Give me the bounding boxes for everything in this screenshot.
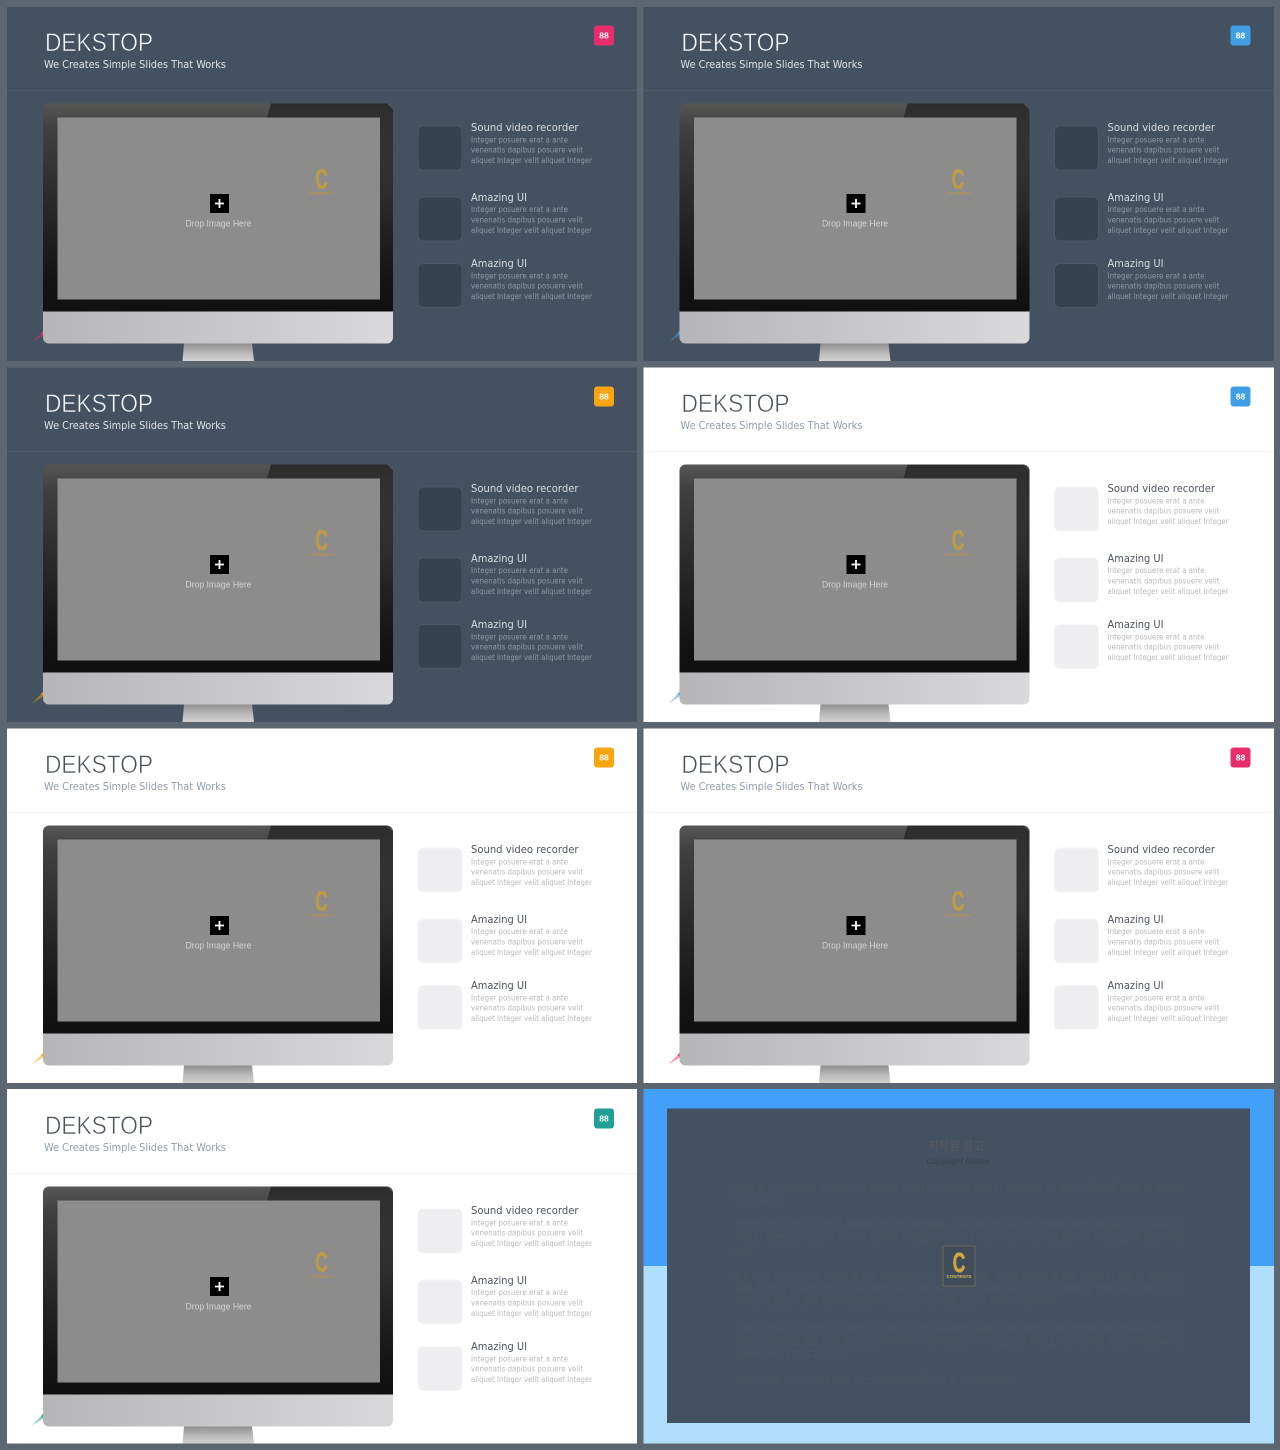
slide background — [644, 368, 1274, 722]
feature 3: Amazing UI — [471, 618, 527, 631]
feature 2: venenatis dapibus posuere velit — [471, 577, 583, 586]
feature 2: Integer posuere erat a ante — [471, 566, 568, 575]
feature 3: venenatis dapibus posuere velit — [1108, 1004, 1220, 1013]
logo: C — [953, 1247, 965, 1278]
feature 3 — [418, 1340, 593, 1390]
badge: 88 — [599, 752, 609, 762]
slide 4: light, blue badge — [644, 368, 1274, 722]
feature 3: Amazing UI — [1108, 257, 1164, 270]
monitor — [680, 826, 1030, 1083]
feature 1: venenatis dapibus posuere velit — [471, 146, 583, 155]
badge: 88 — [1236, 752, 1245, 762]
logo: C — [315, 885, 328, 917]
feature 3: venenatis dapibus posuere velit — [471, 1004, 583, 1013]
copyright body text: 구매한 콘텐츠는 개인과 회사의 업무에 사용할 수 있으나 다른 사용자에게 양도하거나 공유할 수 없습니다. — [734, 1232, 1185, 1243]
logo: CONTENTS — [946, 552, 970, 557]
feature 3: venenatis dapibus posuere velit — [1108, 643, 1220, 652]
screen placeholder — [58, 1200, 380, 1382]
accent pin — [668, 690, 681, 704]
feature 2: Integer posuere erat a ante — [1108, 566, 1205, 575]
feature 2: aliquet Integer velit aliquet Integer — [1108, 587, 1229, 596]
copyright body text: 안내드립니다. — [734, 1194, 784, 1204]
feature 2: Amazing UI — [1108, 913, 1164, 926]
monitor — [43, 104, 393, 361]
copyright body text: 사용 전에 각 글꼴의 라이선스를 확인하시기 바라며 상업적 사용 여부는 저작권자에게 문의하시기 바랍니다. — [734, 1283, 1185, 1294]
feature 2: Integer posuere erat a ante — [1108, 927, 1205, 936]
copyright body text — [734, 1182, 1185, 1385]
feature 2: aliquet Integer velit aliquet Integer — [471, 948, 593, 957]
light blue background lower — [644, 1266, 1274, 1444]
drop image label: Drop Image Here — [186, 940, 252, 952]
feature 1: Sound video recorder — [1108, 121, 1216, 134]
feature 3 — [1054, 979, 1229, 1030]
feature 2: Amazing UI — [471, 1274, 527, 1287]
slide background — [644, 7, 1274, 361]
accent pin — [668, 1052, 681, 1064]
accent pin — [32, 1052, 44, 1064]
feature 1: aliquet Integer velit aliquet Integer — [1108, 517, 1229, 526]
slide 8: copyright notice — [644, 1089, 1274, 1444]
badge — [1230, 386, 1250, 406]
slide 2: dark, blue badge — [644, 7, 1274, 361]
screen placeholder — [58, 840, 380, 1022]
heading — [680, 751, 863, 793]
feature 3 — [1054, 618, 1229, 668]
feature 1: aliquet Integer velit aliquet Integer — [471, 1239, 593, 1248]
drop image label: Drop Image Here — [186, 1302, 252, 1312]
feature 2: venenatis dapibus posuere velit — [471, 1299, 583, 1308]
feature 3: venenatis dapibus posuere velit — [471, 643, 583, 652]
feature 3: Amazing UI — [471, 257, 527, 270]
copyright body text: 양해 부탁드립니다. — [734, 1348, 849, 1359]
heading: DEKSTOP — [682, 751, 790, 779]
feature 1: Sound video recorder — [471, 482, 579, 495]
slide 5: light, orange badge — [7, 728, 637, 1083]
feature 1: venenatis dapibus posuere velit — [471, 1229, 583, 1238]
feature 1 — [418, 482, 593, 531]
feature 2 — [418, 913, 593, 963]
slide background — [7, 7, 637, 361]
logo: CONTENTS — [309, 1274, 334, 1279]
logo: CONTENTS — [946, 191, 970, 196]
monitor — [680, 464, 1030, 722]
accent pin — [32, 1412, 44, 1426]
icon: plus box — [210, 194, 229, 213]
feature 2: venenatis dapibus posuere velit — [1108, 938, 1220, 947]
logo — [943, 885, 973, 926]
feature 1: aliquet Integer velit aliquet Integer — [1108, 156, 1229, 165]
copyright title: 저작권 공고 — [928, 1139, 984, 1153]
copyright body text: 기타 자세한 사항은 고객 센터 또는 제작자에게 문의해 주시기 바랍니다. — [734, 1375, 1016, 1385]
badge: 88 — [599, 392, 609, 402]
logo: CONTENTS — [309, 913, 334, 918]
logo: C — [315, 524, 328, 556]
feature 2: Integer posuere erat a ante — [471, 205, 568, 214]
feature 1 — [1054, 121, 1229, 170]
blue background upper — [644, 1089, 1274, 1266]
feature 3: aliquet Integer velit aliquet Integer — [1108, 292, 1229, 301]
drop image label: Drop Image Here — [822, 940, 888, 952]
drop image label: Drop Image Here — [822, 218, 888, 230]
icon: plus box — [210, 916, 229, 935]
badge — [594, 386, 614, 406]
feature 2: Amazing UI — [1108, 191, 1164, 204]
copyright body text: 본 제품의 저작권은 제작자에게 있으며 구매자는 라이선스 범위 안에서만 이 콘텐츠를 사용할 수 있습니다. — [734, 1182, 1185, 1193]
heading: DEKSTOP — [45, 751, 153, 779]
logo: CONTENTS — [309, 191, 334, 196]
feature 2: aliquet Integer velit aliquet Integer — [1108, 226, 1229, 235]
heading — [44, 390, 226, 432]
screen placeholder — [694, 478, 1016, 660]
icon: plus box — [846, 916, 866, 935]
feature 3: venenatis dapibus posuere velit — [1108, 282, 1220, 291]
feature 2: aliquet Integer velit aliquet Integer — [471, 1309, 593, 1318]
badge — [594, 26, 614, 46]
feature 3: aliquet Integer velit aliquet Integer — [1108, 653, 1229, 662]
feature 2: Amazing UI — [471, 191, 527, 204]
copyright body text: 저작권 안내 콘텐츠의 무단 복제와 배포 및 재판매를 금지하며 위반 시 관련 법률에 따라 책임을 질 수 있습니다. — [734, 1219, 1185, 1230]
feature 2 — [1054, 913, 1229, 963]
feature 1: Integer posuere erat a ante — [1108, 136, 1205, 145]
feature 3: aliquet Integer velit aliquet Integer — [1108, 1014, 1229, 1023]
feature 1 — [1054, 843, 1229, 892]
feature 3: Integer posuere erat a ante — [471, 1355, 568, 1364]
logo: C — [315, 1246, 328, 1278]
feature 1: Sound video recorder — [1108, 843, 1216, 856]
feature 1: Sound video recorder — [471, 1204, 579, 1217]
badge — [594, 748, 614, 768]
logo: C — [952, 163, 964, 195]
logo: C — [952, 885, 964, 917]
heading: DEKSTOP — [682, 29, 790, 57]
logo: C — [952, 524, 964, 556]
feature 3: Integer posuere erat a ante — [471, 272, 568, 281]
accent pin — [32, 690, 44, 704]
heading: DEKSTOP — [45, 29, 153, 57]
feature 1: Integer posuere erat a ante — [471, 1219, 568, 1228]
screen placeholder — [58, 478, 380, 660]
drop image label: Drop Image Here — [822, 580, 888, 590]
slide background — [644, 728, 1274, 1083]
feature 2: aliquet Integer velit aliquet Integer — [471, 587, 593, 596]
feature 2: aliquet Integer velit aliquet Integer — [471, 226, 593, 235]
feature 1 — [418, 1204, 593, 1253]
copyright body text: 입니다. — [734, 1246, 754, 1257]
copyright body text: 제공된 이미지를 별도의 상품으로 판매하거나 다른 콘텐츠의 구성 요소로 재배포하는 행위는 허용되지 않습니다. — [734, 1336, 1185, 1347]
feature 2 — [1054, 191, 1229, 241]
feature 2: Integer posuere erat a ante — [471, 927, 568, 936]
accent pin — [668, 330, 681, 342]
heading: We Creates Simple Slides That Works — [680, 780, 863, 793]
copyright subtitle: Copyright Notice — [927, 1156, 990, 1166]
heading — [44, 751, 226, 793]
slide background — [7, 1089, 637, 1444]
logo — [306, 1246, 336, 1288]
badge: 88 — [599, 30, 609, 40]
monitor — [43, 826, 393, 1083]
feature 1 — [1054, 482, 1229, 531]
heading: DEKSTOP — [682, 390, 790, 418]
badge: 88 — [599, 1114, 609, 1124]
feature 1: venenatis dapibus posuere velit — [1108, 868, 1220, 877]
feature 3: Integer posuere erat a ante — [471, 994, 568, 1003]
copyright body text: 자세한 내용은 제품과 함께 제공된 라이선스 안내 문서를 참고해 주시기 바랍니다. — [734, 1296, 1056, 1307]
logo — [943, 524, 973, 566]
feature 3: aliquet Integer velit aliquet Integer — [471, 1014, 593, 1023]
feature 3: venenatis dapibus posuere velit — [471, 282, 583, 291]
logo: CONTENTS — [947, 1274, 971, 1279]
feature 3: Integer posuere erat a ante — [471, 633, 568, 642]
feature 2: venenatis dapibus posuere velit — [1108, 577, 1220, 586]
feature 2 — [418, 552, 593, 602]
feature 2: venenatis dapibus posuere velit — [471, 938, 583, 947]
icon: plus box — [210, 1277, 229, 1296]
slide 1: dark, pink badge — [7, 7, 637, 361]
feature 2: venenatis dapibus posuere velit — [1108, 216, 1220, 225]
screen placeholder — [58, 118, 380, 300]
feature 1: Sound video recorder — [471, 121, 579, 134]
feature 1: Integer posuere erat a ante — [471, 136, 568, 145]
feature 1: Sound video recorder — [1108, 482, 1216, 495]
feature 1: Integer posuere erat a ante — [1108, 858, 1205, 867]
feature 1 — [418, 843, 593, 892]
copyright body text: 이미지 안내 본 콘텐츠의 이미지는 예시용으로 제공되며 실제 사용 시에는 사용 권한을 확인하셔야 합니다. — [734, 1323, 1185, 1334]
badge: 88 — [1236, 30, 1245, 40]
logo — [943, 1246, 975, 1286]
heading — [680, 29, 863, 71]
feature 1: aliquet Integer velit aliquet Integer — [471, 878, 593, 887]
feature 2: Amazing UI — [1108, 552, 1164, 565]
feature 3: Integer posuere erat a ante — [1108, 994, 1205, 1003]
feature 3 — [418, 979, 593, 1030]
feature 3: Integer posuere erat a ante — [1108, 272, 1205, 281]
feature 3: venenatis dapibus posuere velit — [471, 1365, 583, 1374]
badge — [1230, 748, 1250, 768]
logo — [306, 885, 336, 926]
feature 1: venenatis dapibus posuere velit — [1108, 146, 1220, 155]
feature 3: aliquet Integer velit aliquet Integer — [471, 653, 593, 662]
logo: CONTENTS — [946, 913, 970, 918]
copyright body text: 폰트 안내 본 콘텐츠에 사용된 글꼴과 이미지는 각 저작권자의 사용 조건을 따르며 별도로 제공되지 않을 수 있습니다. — [734, 1271, 1185, 1282]
logo: C — [315, 163, 328, 195]
feature 2 — [418, 1274, 593, 1324]
heading: DEKSTOP — [45, 1112, 153, 1140]
feature 1: Integer posuere erat a ante — [471, 858, 568, 867]
feature 2: Integer posuere erat a ante — [471, 1288, 568, 1297]
monitor — [43, 464, 393, 722]
copyright panel — [667, 1108, 1250, 1423]
screen placeholder — [694, 118, 1016, 300]
heading — [44, 29, 226, 71]
slide 3: dark, orange badge — [7, 368, 637, 722]
heading: We Creates Simple Slides That Works — [44, 58, 226, 71]
feature 1: aliquet Integer velit aliquet Integer — [1108, 878, 1229, 887]
slide background — [7, 728, 637, 1083]
heading: We Creates Simple Slides That Works — [680, 419, 863, 432]
feature 1: Sound video recorder — [471, 843, 579, 856]
monitor — [680, 104, 1030, 361]
feature 3: Integer posuere erat a ante — [1108, 633, 1205, 642]
feature 3 — [1054, 257, 1229, 308]
heading — [680, 390, 863, 432]
feature 3: Amazing UI — [471, 1340, 527, 1353]
feature 1: venenatis dapibus posuere velit — [1108, 507, 1220, 516]
logo — [943, 163, 973, 204]
logo — [306, 163, 336, 204]
feature 1: Integer posuere erat a ante — [471, 497, 568, 506]
feature 3: Amazing UI — [471, 979, 527, 992]
heading: We Creates Simple Slides That Works — [44, 1141, 226, 1154]
feature 3: Amazing UI — [1108, 979, 1164, 992]
feature 3: aliquet Integer velit aliquet Integer — [471, 1375, 593, 1384]
feature 2: aliquet Integer velit aliquet Integer — [1108, 948, 1229, 957]
monitor — [43, 1186, 393, 1444]
icon: plus box — [846, 555, 866, 574]
feature 1 — [418, 121, 593, 170]
feature 1: aliquet Integer velit aliquet Integer — [471, 517, 593, 526]
badge: 88 — [1236, 392, 1245, 402]
icon: plus box — [846, 194, 866, 213]
feature 2: Amazing UI — [471, 552, 527, 565]
feature 2 — [1054, 552, 1229, 602]
heading: DEKSTOP — [45, 390, 153, 418]
feature 3 — [418, 257, 593, 308]
logo: CONTENTS — [309, 552, 334, 557]
feature 3: Amazing UI — [1108, 618, 1164, 631]
feature 2: Amazing UI — [471, 913, 527, 926]
feature 2: Integer posuere erat a ante — [1108, 205, 1205, 214]
feature 1: Integer posuere erat a ante — [1108, 497, 1205, 506]
logo — [306, 524, 336, 566]
slide 6: light, pink badge — [644, 728, 1274, 1083]
feature 1: venenatis dapibus posuere velit — [471, 868, 583, 877]
feature 1: aliquet Integer velit aliquet Integer — [471, 156, 593, 165]
heading — [44, 1112, 226, 1154]
badge — [1230, 26, 1250, 46]
heading: We Creates Simple Slides That Works — [44, 419, 226, 432]
accent pin — [32, 330, 44, 342]
drop image label: Drop Image Here — [186, 218, 252, 230]
feature 2 — [418, 191, 593, 241]
slide background — [7, 368, 637, 722]
feature 2: venenatis dapibus posuere velit — [471, 216, 583, 225]
feature 3: aliquet Integer velit aliquet Integer — [471, 292, 593, 301]
feature 3 — [418, 618, 593, 668]
heading: We Creates Simple Slides That Works — [680, 58, 863, 71]
heading: We Creates Simple Slides That Works — [44, 780, 226, 793]
feature 1: venenatis dapibus posuere velit — [471, 507, 583, 516]
screen placeholder — [694, 840, 1016, 1022]
drop image label: Drop Image Here — [186, 580, 252, 590]
badge — [594, 1108, 614, 1128]
slide 7: light, teal badge — [7, 1089, 637, 1444]
icon: plus box — [210, 555, 229, 574]
